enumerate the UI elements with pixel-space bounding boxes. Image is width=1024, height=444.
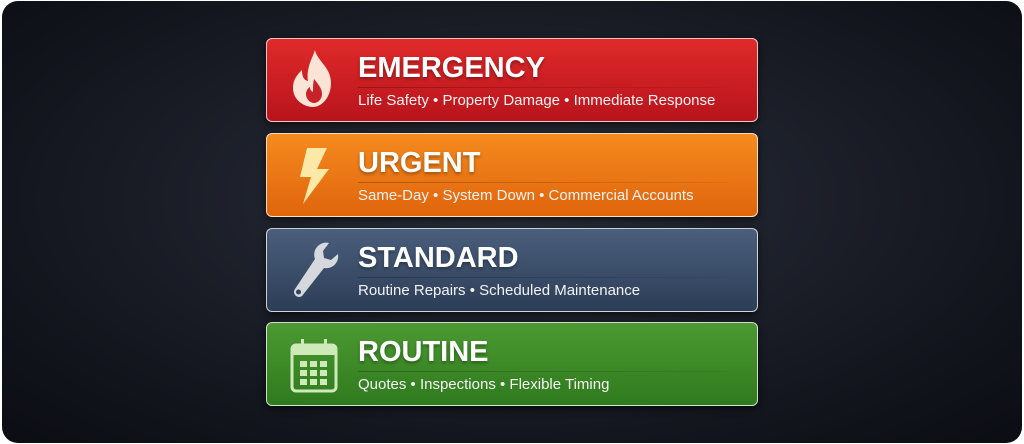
icon: lightning [300,148,329,204]
subtitle emergency: Life Safety • Property Damage • Immediate Response [358,92,715,109]
icon: calendar [290,339,338,392]
subtitle standard: Routine Repairs • Scheduled Maintenance [358,282,640,299]
card: urgent [266,133,758,217]
card: emergency [266,38,758,122]
card: routine: ROUTINE [358,336,488,368]
subtitle urgent: Same-Day • System Down • Commercial Accounts [358,187,694,204]
icon: wrench [294,242,338,297]
card: urgent: URGENT [358,147,480,179]
card: standard [266,228,758,312]
icon: flame [293,50,331,107]
card: emergency: EMERGENCY [358,52,545,84]
card: routine [266,322,758,406]
card: standard: STANDARD [358,242,519,274]
subtitle routine: Quotes • Inspections • Flexible Timing [358,376,609,393]
